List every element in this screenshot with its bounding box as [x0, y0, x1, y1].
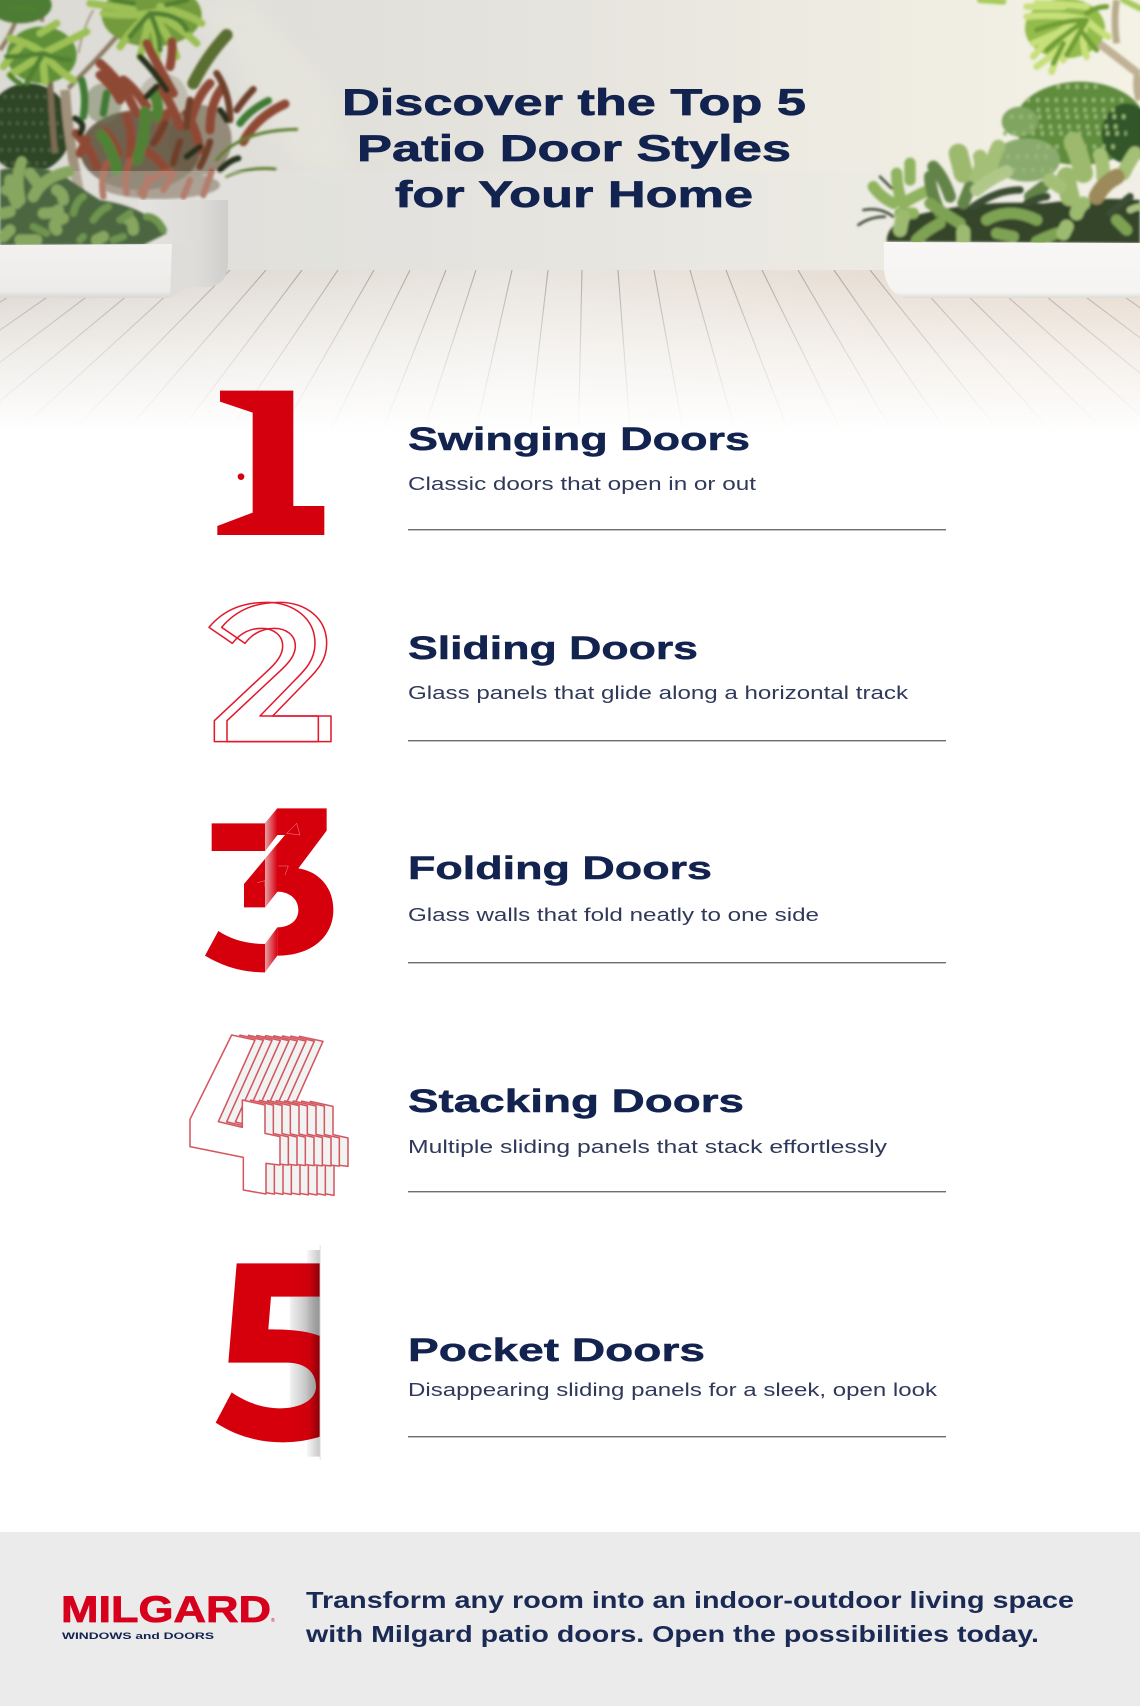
logo: Milgard: WINDOWS and DOORS [62, 1631, 214, 1642]
numeral 3 folded [205, 808, 333, 972]
croton leaves, red [76, 42, 285, 170]
logo: Milgard: ® [271, 1617, 275, 1624]
numeral 5 sliding into wall pocket [216, 1245, 321, 1460]
description: Glass walls that fold neatly to one side [408, 905, 819, 925]
description: Classic doors that open in or out [408, 474, 756, 494]
tree trunks [65, 90, 80, 197]
numeral 2 as sliding outlines [209, 602, 331, 742]
item 3: folding doors [205, 808, 946, 972]
title: Discover the Top 5 [342, 82, 806, 123]
item 5: pocket doors [216, 1245, 946, 1460]
broad leaves [873, 163, 930, 213]
title [342, 82, 806, 215]
tree trunk [1097, 42, 1140, 75]
title: for Your Home [395, 174, 753, 215]
call to action [305, 1587, 1074, 1647]
lower foliage dark base [887, 199, 1140, 243]
lower croton stems [100, 171, 220, 199]
description: Glass panels that glide along a horizontal track [408, 683, 909, 703]
top canopy [102, 0, 202, 47]
dark bush [0, 83, 72, 173]
croton backing foliage [80, 110, 200, 190]
wall [0, 0, 1140, 272]
left lower bush [0, 162, 167, 245]
call to action: with Milgard patio doors. Open the possibilities today. [305, 1621, 1039, 1647]
left plants [0, 0, 297, 199]
heading: Folding Doors [408, 850, 712, 886]
heading: Swinging Doors [408, 421, 750, 457]
numeral 1 as open door [217, 391, 324, 535]
title: Patio Door Styles [357, 128, 791, 169]
heading: Pocket Doors [408, 1332, 705, 1368]
back left planter [138, 200, 228, 287]
bush with small leaves [1015, 82, 1140, 165]
top canopy [1025, 0, 1105, 58]
front left planter [0, 240, 194, 298]
croton leaves, green [193, 35, 227, 83]
right planter [884, 242, 1140, 298]
item 2: sliding doors [209, 602, 946, 742]
heading: Sliding Doors [408, 630, 698, 666]
numeral 4 stacked outlines [190, 1035, 348, 1195]
description: Multiple sliding panels that stack effortlessly [408, 1137, 887, 1157]
right plants [858, 0, 1140, 243]
background: patio scene [0, 0, 1140, 416]
footer panel [0, 1532, 1140, 1706]
item 1: swinging doors [217, 391, 946, 535]
heading: Stacking Doors [408, 1083, 744, 1119]
logo: Milgard: MILGARD [61, 1589, 271, 1630]
item 4: stacking doors [190, 1035, 946, 1195]
call to action: Transform any room into an indoor-outdoor living space [306, 1587, 1074, 1613]
pale band over lower wall and plants [0, 171, 1140, 270]
wooden floor [0, 270, 1140, 416]
description: Disappearing sliding panels for a sleek, open look [408, 1380, 938, 1400]
logo: Milgard [61, 1589, 275, 1642]
light streak on wall [195, 0, 350, 170]
